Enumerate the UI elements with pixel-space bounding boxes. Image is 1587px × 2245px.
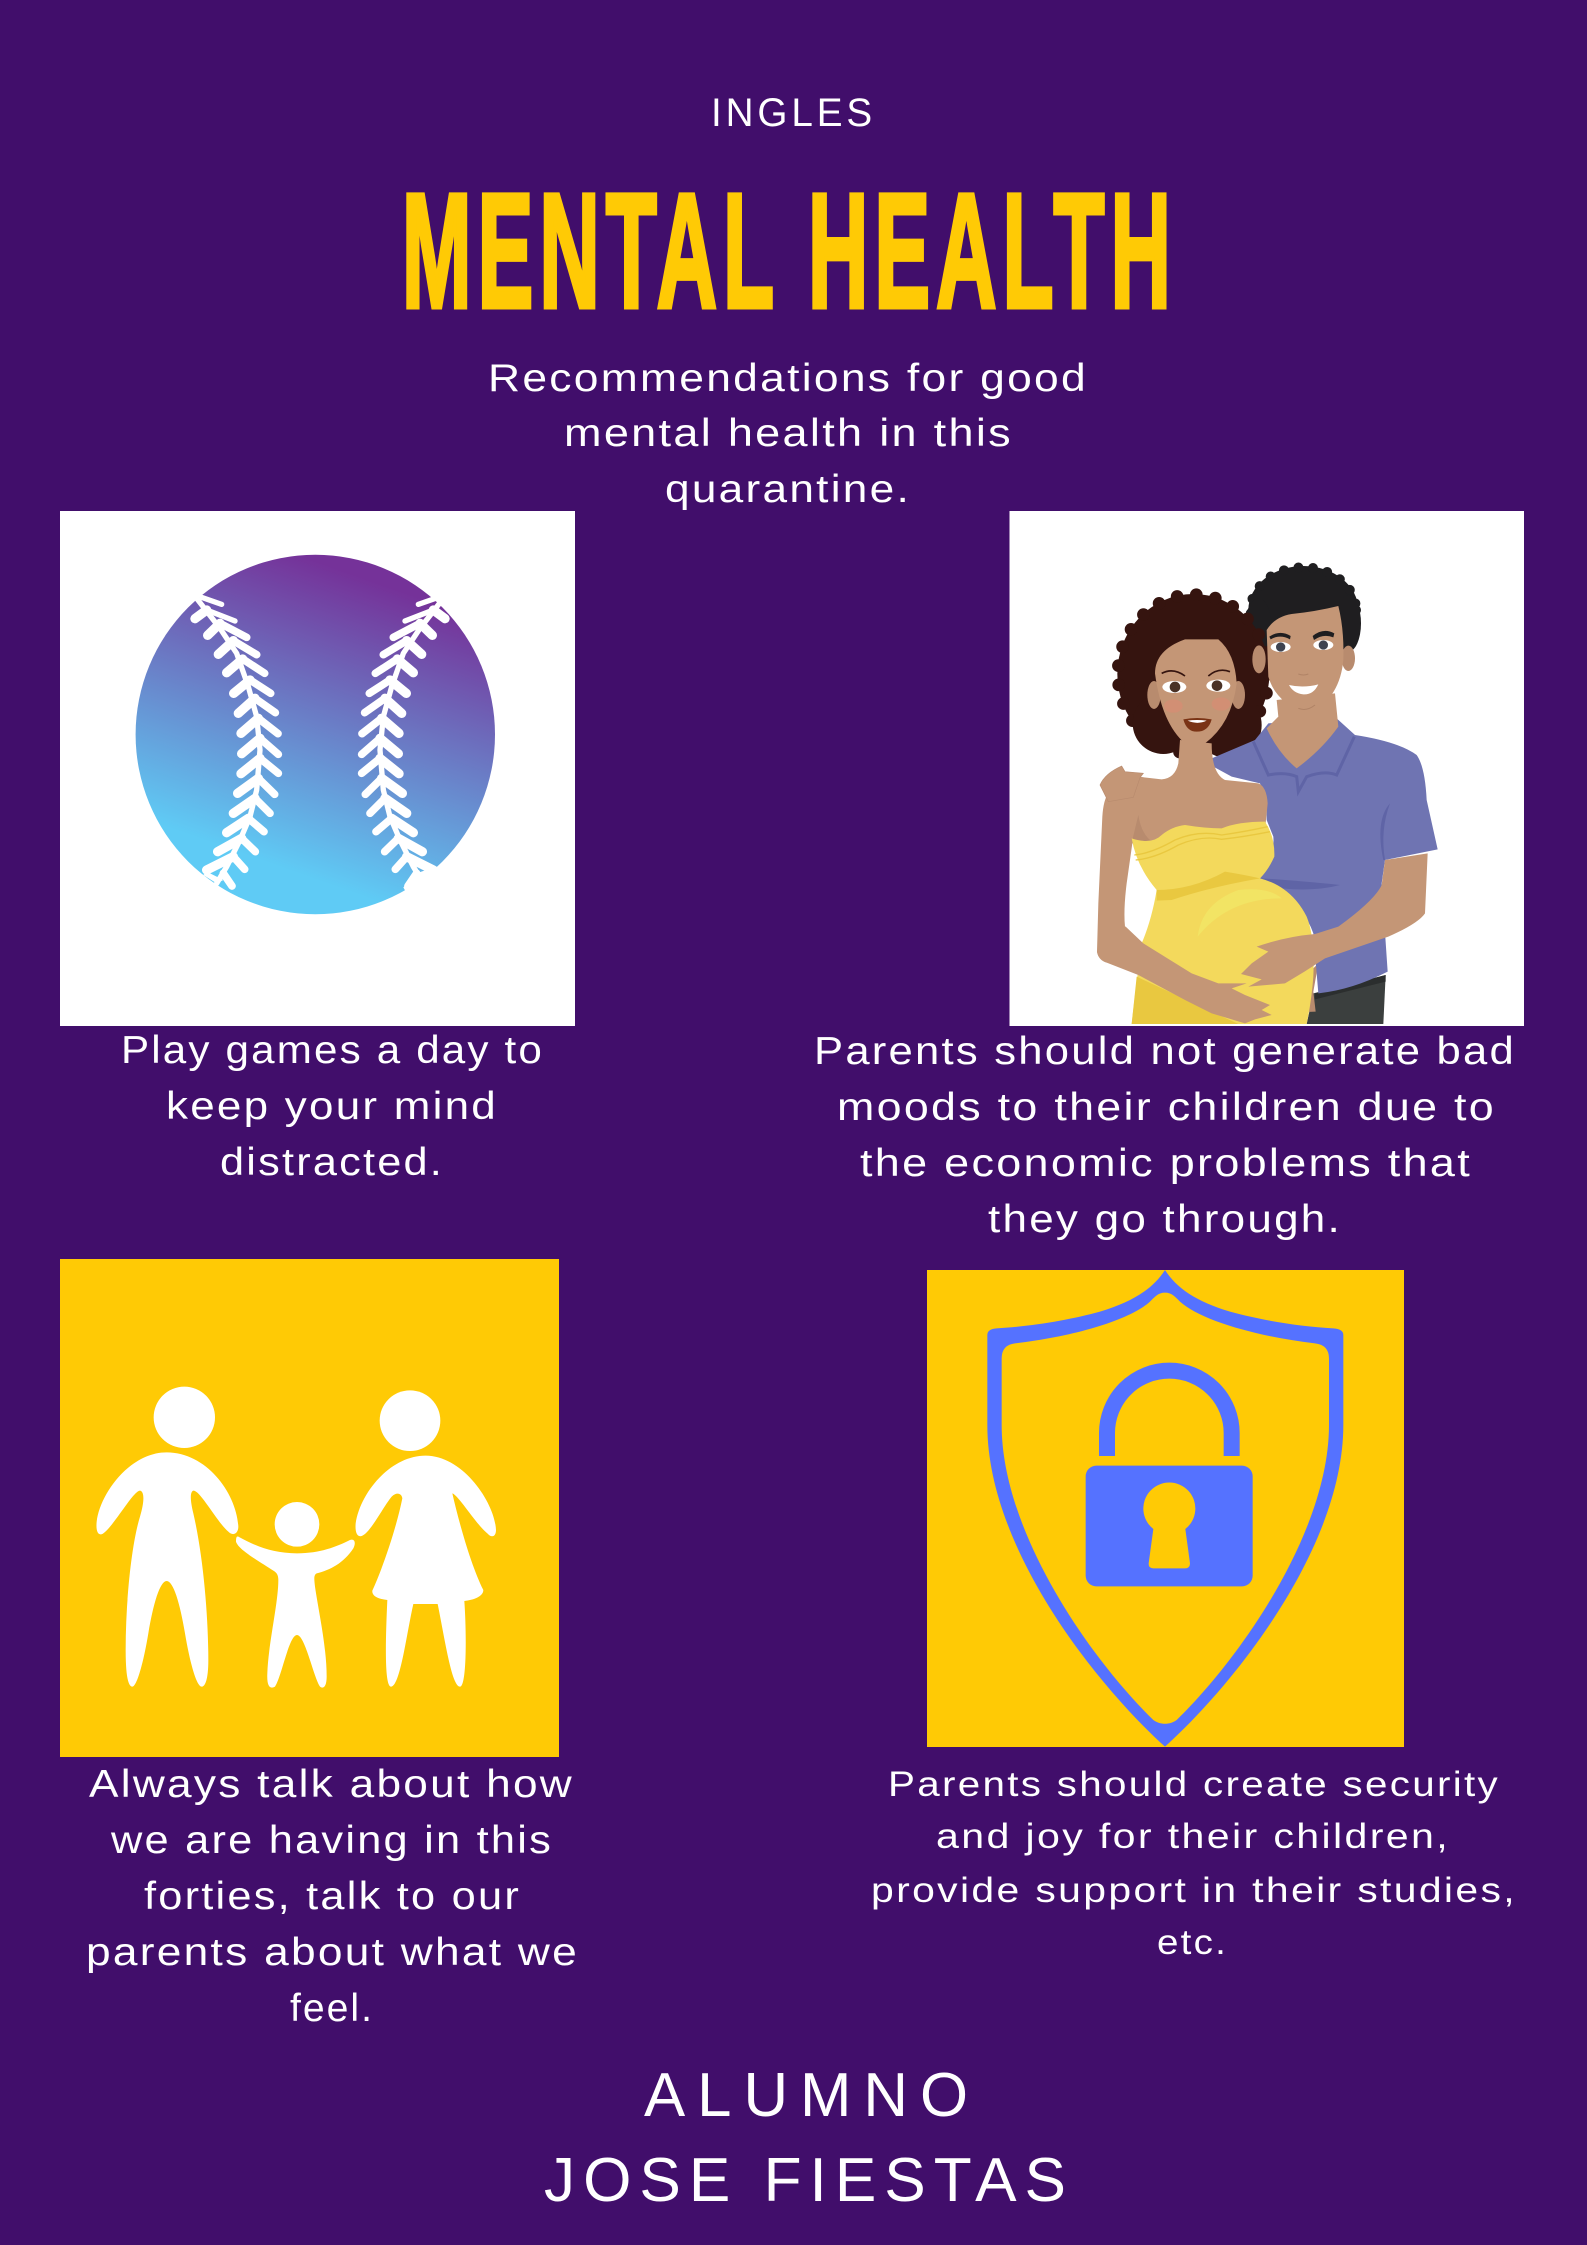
caption: parents moods: Parents should not generate bad [814,1030,1516,1073]
woman's features [1162,670,1230,732]
caption: security [871,1765,1517,1962]
caption: always talk: we are having in this [110,1819,553,1862]
collar [1253,737,1354,792]
footer: student name [544,2061,1074,2215]
panel: family [60,1259,559,1757]
child [236,1502,355,1688]
caption: play games: distracted. [220,1141,444,1184]
man's ears [1252,645,1355,673]
shackle [1107,1371,1232,1456]
caption: security: provide support in their studies, [871,1871,1517,1910]
panel: security [927,1270,1404,1747]
mother [356,1390,496,1687]
caption: play games: keep your mind [166,1085,498,1128]
caption: always talk: forties, talk to our [144,1875,521,1918]
caption: parents moods: they go through. [988,1198,1342,1241]
subtitle: Recommendations for good [488,357,1088,400]
chest shading [1132,815,1155,843]
shield [987,1270,1343,1747]
man's shirt [1212,718,1438,993]
panel: baseball [60,511,575,1026]
shirt folds [1260,878,1340,889]
right seam [362,597,445,886]
woman's ears [1147,681,1245,709]
caption: parents moods [814,1030,1516,1241]
caption: security: and joy for their children, [936,1817,1450,1856]
man's hair [1245,566,1361,655]
man's pants [1307,975,1386,1024]
subtitle: quarantine. [665,468,911,511]
label: INGLES: INGLES [711,91,876,135]
caption: parents moods: moods to their children due to [837,1086,1496,1129]
panel: parents illustration [1010,511,1524,1026]
caption: play games [121,1029,544,1184]
caption: always talk: parents about what we [86,1931,579,1974]
icon: shield with padlock [987,1270,1343,1747]
caption: play games: Play games a day to [121,1029,544,1072]
caption: always talk: Always talk about how [89,1763,574,1806]
man's arm and hand [1241,853,1428,987]
man's face [1267,606,1343,712]
caption: always talk [86,1763,579,2030]
left seam [195,597,278,886]
woman's face [1155,639,1237,746]
footer: student name: JOSE FIESTAS [544,2146,1074,2215]
caption: security: Parents should create security [888,1765,1500,1804]
footer: student name: ALUMNO [644,2061,980,2130]
woman's chest and shoulder [1097,740,1268,963]
caption: always talk: feel. [290,1987,374,2030]
dress shading [1132,827,1282,1024]
woman's forearm and hand [1097,923,1272,1023]
father [96,1387,238,1687]
dress [1132,822,1314,1024]
man's neck [1267,693,1338,768]
subtitle: mental health in this [564,412,1013,455]
lock body [1086,1466,1253,1586]
man's hand on shoulder [1100,766,1143,802]
icon: family [96,1387,496,1688]
subtitle [488,357,1088,511]
illustration: expecting couple [1097,566,1438,1024]
man's back hand [1289,963,1318,1013]
man's features [1269,631,1334,709]
caption: security: etc. [1157,1923,1228,1962]
caption: parents moods: the economic problems that [860,1142,1472,1185]
keyhole [1143,1483,1195,1568]
icon: baseball [136,555,495,914]
woman's hair [1117,594,1269,758]
